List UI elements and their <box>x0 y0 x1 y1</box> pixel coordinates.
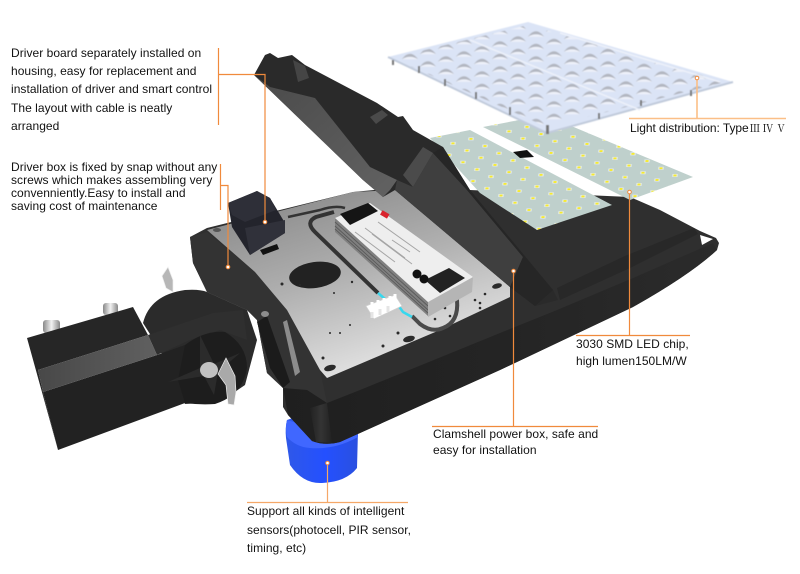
white terminal connector <box>366 294 402 319</box>
callout: LED chip: 3030 SMD LED chip, <box>576 337 689 351</box>
LED driver power supply <box>335 203 473 317</box>
plate hole <box>287 259 343 291</box>
metal mounting plate <box>207 190 510 378</box>
callout: driver board: installation of driver and smart control <box>11 82 212 96</box>
callout: driver board: The layout with cable is neatly <box>11 101 172 115</box>
callout: driver board: housing, easy for replacement and <box>11 64 196 78</box>
callout: sensors <box>247 461 411 555</box>
callout: clamshell power box: easy for installation <box>433 443 537 457</box>
callout: light distribution: Light distribution: TypeⅢ Ⅳ Ⅴ <box>630 121 786 136</box>
bracket back ring <box>143 290 257 404</box>
rounded corner <box>310 403 332 443</box>
lens pins <box>392 60 692 134</box>
lens panel <box>388 22 733 134</box>
callout: driver box: saving cost of maintenance <box>11 199 158 213</box>
lid inner lighter face <box>254 75 397 197</box>
callout: driver board: Driver board separately installed on <box>11 46 201 60</box>
callout: driver box: Driver box is fixed by snap without any <box>11 160 217 174</box>
callout: LED chip: high lumen150LM/W <box>576 354 687 368</box>
plate mounting holes <box>213 228 502 372</box>
callout: driver box: screws which makes assembling very <box>11 173 212 187</box>
icon: blue sensor <box>286 405 358 483</box>
right cavity pockets <box>557 228 698 300</box>
LED board left <box>430 130 612 230</box>
callout: light distribution <box>629 76 786 136</box>
black cable <box>288 207 457 330</box>
callout: sensors: sensors(photocell, PIR sensor, <box>247 523 411 537</box>
icon: mounting bracket <box>27 267 257 450</box>
right side tip <box>700 235 713 245</box>
bracket disc with spokes <box>168 332 247 404</box>
housing body <box>190 188 719 444</box>
callout: sensors: Support all kinds of intelligent <box>247 504 405 518</box>
callout: driver box: convenniently.Easy to install and <box>11 186 186 200</box>
callout: clamshell power box: Clamshell power box, safe and <box>433 427 598 441</box>
driver box <box>228 191 285 255</box>
callout: clamshell power box <box>432 269 598 457</box>
bracket bolts <box>43 303 118 333</box>
clamshell lid <box>254 53 558 306</box>
left rim <box>190 232 327 403</box>
LED board right <box>483 115 693 200</box>
callout: sensors: timing, etc) <box>247 541 306 555</box>
front wall <box>283 243 717 444</box>
side latch <box>257 316 290 388</box>
lid ribs <box>403 147 433 187</box>
callout: driver board <box>11 46 267 224</box>
driver labels <box>340 203 378 225</box>
callout: driver board: arranged <box>11 119 59 133</box>
callout: driver box <box>11 160 230 269</box>
bracket box <box>43 345 185 450</box>
callout: LED chip <box>576 190 690 368</box>
spring clips <box>162 267 236 405</box>
